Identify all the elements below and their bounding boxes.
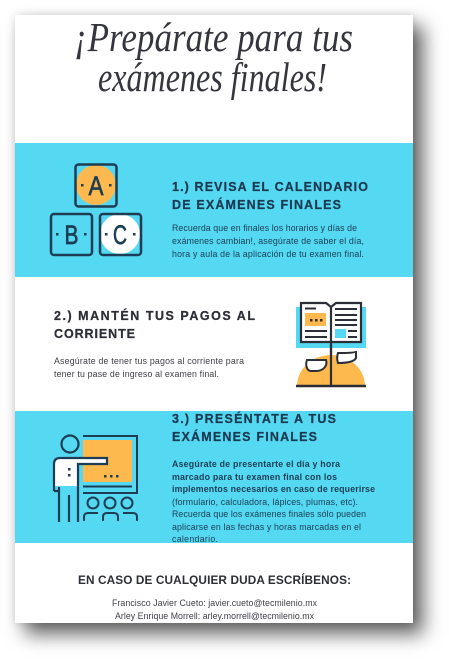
panel: step 2: [54, 303, 366, 386]
panel: step 1: [15, 143, 413, 277]
text block: step 3: aplicarse en las fechas y horas marcadas en el: [172, 522, 361, 532]
heading: step 3: 3.) PRESÉNTATE A TUS: [172, 411, 336, 426]
text block: step 1: Recuerda que en finales los horarios y días de: [172, 223, 357, 233]
text block: contacts: Arley Enrique Morrell: arley.morrell@tecmilenio.mx: [115, 611, 315, 621]
icon: ABC blocks: B: [64, 220, 78, 250]
heading: step 2: 2.) MANTÉN TUS PAGOS AL: [54, 308, 255, 323]
heading: contact: EN CASO DE CUALQUIER DUDA ESCRÍBENOS:: [78, 573, 351, 587]
text block: step 2: Asegúrate de tener tus pagos al corriente para: [54, 356, 244, 366]
text block: contacts: [112, 598, 318, 621]
heading: step 1: 1.) REVISA EL CALENDARIO: [172, 180, 368, 194]
text block: step 3: Recuerda que los exámenes finales sólo pueden: [172, 509, 366, 519]
icon: ABC blocks: C: [113, 220, 127, 250]
text block: step 3: [172, 459, 375, 544]
text block: contacts: Francisco Javier Cueto: javier.cueto@tecmilenio.mx: [112, 598, 318, 608]
text block: step 3: marcado para tu examen final con los: [172, 472, 337, 482]
heading: step 3: EXÁMENES FINALES: [172, 429, 317, 444]
icon: ABC blocks: A: [88, 171, 104, 201]
title: exámenes finales!: [98, 54, 327, 100]
heading: step 1: DE EXÁMENES FINALES: [172, 197, 341, 212]
heading: step 1: [172, 180, 368, 212]
text block: step 2: tener tu pase de ingreso al examen final.: [54, 369, 219, 379]
text block: step 2: [54, 356, 244, 379]
text block: step 1: [172, 223, 364, 259]
heading: step 3: [172, 411, 336, 444]
heading: step 2: CORRIENTE: [54, 327, 135, 341]
text block: step 3: implementos necesarios en caso de requerirse: [172, 484, 375, 494]
title: [74, 14, 353, 100]
panel: step 3: [15, 411, 413, 544]
panel: contact: [78, 573, 351, 621]
text block: step 3: Asegúrate de presentarte el día y hora: [172, 459, 340, 469]
text block: step 1: hora y aula de la aplicación de tu examen final.: [172, 249, 364, 259]
text block: step 3: calendario.: [172, 534, 218, 544]
icon: presenter at board: [54, 436, 137, 522]
icon: ABC blocks: [51, 164, 141, 255]
text block: step 1: exámenes cambian!, asegúrate de saber el día,: [172, 236, 364, 246]
text block: step 3: (formulario, calculadora, lápices, plumas, etc).: [172, 497, 358, 507]
title: ¡Prepárate para tus: [74, 14, 353, 60]
icon: open book plant: [296, 303, 366, 386]
heading: step 2: [54, 308, 255, 341]
